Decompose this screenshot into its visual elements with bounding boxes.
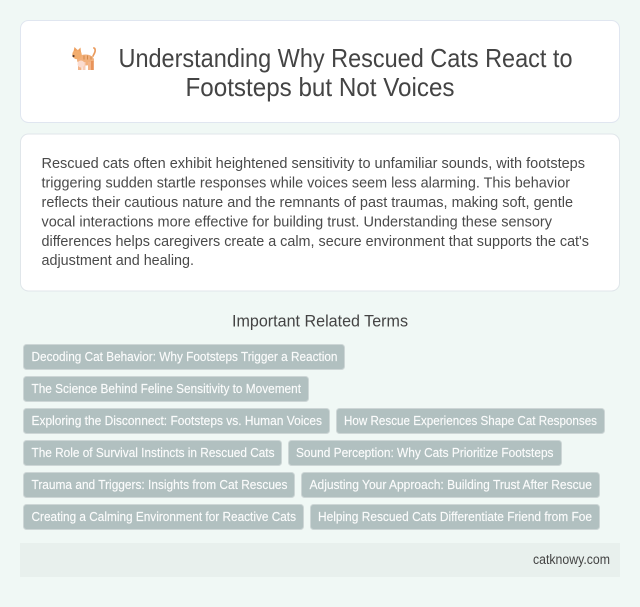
text block: description: Rescued cats often exhibit heightened sensitivity to unfamiliar sounds, with footsteps (42, 156, 585, 172)
footer (20, 543, 620, 577)
tag: calming environment: Creating a Calming Environment for Reactive Cats (32, 509, 296, 524)
text block: description: triggering sudden startle responses while voices seem less alarming. This behavior (42, 176, 570, 192)
tag: decoding cat behavior: Decoding Cat Behavior: Why Footsteps Trigger a Reaction (32, 349, 338, 364)
icon: cat (72, 47, 96, 70)
tag: friend from foe (310, 504, 600, 530)
tag: adjusting your approach: Adjusting Your Approach: Building Trust After Rescue (310, 477, 592, 492)
tag: rescue experiences: How Rescue Experiences Shape Cat Responses (344, 413, 597, 428)
title (118, 43, 572, 102)
tag: decoding cat behavior (24, 344, 344, 370)
text block: description: reflects their cautious nature and the remnants of past traumas, making soft, gentle (42, 195, 573, 211)
tag: rescue experiences (336, 408, 604, 434)
tag: sound perception: Sound Perception: Why Cats Prioritize Footsteps (296, 445, 554, 460)
text block: description: adjustment and healing. (42, 253, 194, 269)
panel: related term tags (24, 344, 604, 530)
tag: science of sensitivity (24, 376, 308, 402)
title: Understanding Why Rescued Cats React to (118, 43, 572, 73)
text block: description: differences helps caregivers create a calm, secure environment that supports the cat's (42, 234, 589, 250)
tag: survival instincts (24, 440, 282, 466)
tag: exploring the disconnect (24, 408, 330, 434)
tag: science of sensitivity: The Science Behind Feline Sensitivity to Movement (32, 381, 301, 396)
tag: trauma and triggers: Trauma and Triggers: Insights from Cat Rescues (32, 477, 288, 492)
tag: sound perception (288, 440, 562, 466)
tag: trauma and triggers (24, 472, 294, 498)
tag: friend from foe: Helping Rescued Cats Differentiate Friend from Foe (318, 509, 592, 524)
footer: catknowy.com (533, 552, 610, 567)
heading: related terms: Important Related Terms (232, 312, 408, 330)
tag: exploring the disconnect: Exploring the Disconnect: Footsteps vs. Human Voices (32, 413, 322, 428)
text block: description: vocal interactions more effective for building trust. Understanding these sensory (42, 214, 553, 230)
tag: calming environment (24, 504, 304, 530)
panel: title card (20, 20, 620, 122)
tag: survival instincts: The Role of Survival Instincts in Rescued Cats (32, 445, 275, 460)
panel: description card (20, 134, 620, 291)
title: Footsteps but Not Voices (186, 72, 454, 102)
tag: adjusting your approach (302, 472, 600, 498)
text block: description (42, 156, 589, 269)
